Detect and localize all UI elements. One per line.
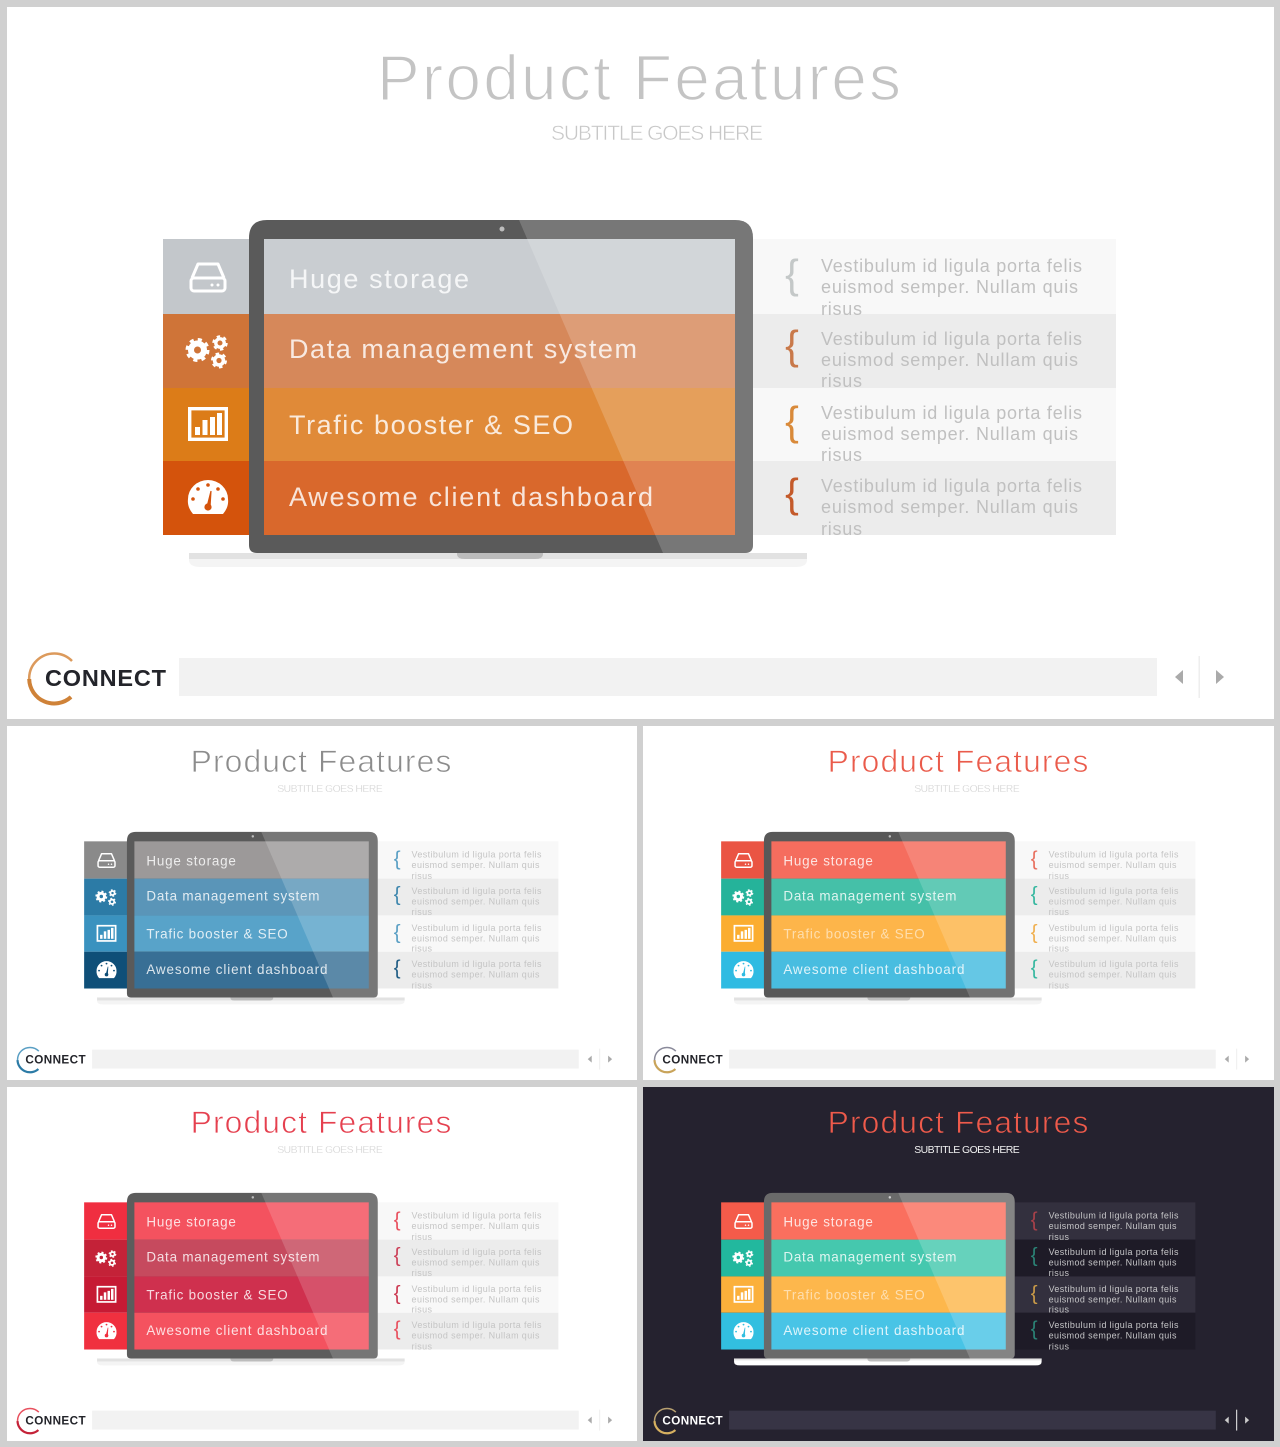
brace 1: { bbox=[785, 251, 799, 297]
description 2: risus bbox=[1049, 1268, 1070, 1278]
description 3: Vestibulum id ligula porta felis bbox=[821, 403, 1082, 423]
description 2: Vestibulum id ligula porta felis bbox=[1049, 886, 1179, 896]
description 4: Vestibulum id ligula porta felis bbox=[1049, 959, 1179, 969]
icon: gears bbox=[96, 1251, 116, 1266]
feature label 1: Huge storage bbox=[146, 1215, 236, 1230]
navigation arrows bbox=[1225, 1049, 1249, 1070]
icon: dashboard gauge bbox=[733, 961, 754, 978]
description 2: euismod semper. Nullam quis bbox=[1049, 1257, 1177, 1267]
panel: main slide, orange theme bbox=[7, 7, 1274, 719]
description 1: risus bbox=[412, 871, 433, 881]
brace 3: { bbox=[394, 1283, 401, 1305]
subtitle: SUBTITLE GOES HERE bbox=[277, 1145, 383, 1156]
description 4: risus bbox=[1049, 1342, 1070, 1352]
icon column bbox=[84, 841, 129, 989]
brace 3: { bbox=[394, 922, 401, 944]
description 1: Vestibulum id ligula porta felis bbox=[1049, 850, 1179, 860]
description 2: euismod semper. Nullam quis bbox=[412, 896, 540, 906]
icon: bar chart bbox=[97, 926, 116, 941]
description 3: risus bbox=[1049, 944, 1070, 954]
brace 1: { bbox=[394, 849, 401, 871]
title: Product Features bbox=[191, 1104, 451, 1140]
description 4: risus bbox=[1049, 981, 1070, 991]
footer bar bbox=[729, 1411, 1216, 1430]
brace 3: { bbox=[1031, 1283, 1038, 1305]
description rows bbox=[378, 1202, 558, 1352]
description 1: Vestibulum id ligula porta felis bbox=[1049, 1211, 1179, 1221]
icon: dashboard gauge bbox=[97, 961, 117, 978]
brace 2: { bbox=[1031, 1245, 1038, 1267]
description 3: euismod semper. Nullam quis bbox=[1049, 933, 1177, 943]
icon: storage drive bbox=[98, 854, 115, 867]
panel: small slide, red theme bbox=[7, 1087, 637, 1441]
description rows bbox=[378, 841, 558, 991]
description rows bbox=[1015, 841, 1195, 991]
footer bar bbox=[92, 1411, 579, 1430]
feature label 3: Trafic booster & SEO bbox=[289, 410, 573, 440]
icon: bar chart bbox=[734, 926, 753, 941]
icon column bbox=[163, 239, 253, 535]
feature label 2: Data management system bbox=[783, 1250, 957, 1265]
logo: CONNECT bbox=[25, 1054, 86, 1067]
laptop bbox=[97, 832, 405, 1004]
footer bar bbox=[729, 1050, 1216, 1069]
icon: bar chart bbox=[97, 1287, 116, 1302]
feature label 1: Huge storage bbox=[289, 264, 469, 294]
description 3: Vestibulum id ligula porta felis bbox=[1049, 923, 1179, 933]
feature label 3: Trafic booster & SEO bbox=[783, 926, 925, 941]
description 1: risus bbox=[412, 1232, 433, 1242]
title: Product Features bbox=[828, 1104, 1088, 1140]
subtitle: SUBTITLE GOES HERE bbox=[551, 122, 763, 145]
brace 2: { bbox=[1031, 884, 1038, 906]
description 2: Vestibulum id ligula porta felis bbox=[821, 329, 1082, 349]
footer bar bbox=[92, 1050, 579, 1069]
description 1: Vestibulum id ligula porta felis bbox=[412, 1211, 542, 1221]
description 4: risus bbox=[412, 981, 433, 991]
feature label 4: Awesome client dashboard bbox=[289, 482, 653, 512]
description 3: Vestibulum id ligula porta felis bbox=[1049, 1284, 1179, 1294]
icon: bar chart bbox=[190, 409, 226, 439]
brace 4: { bbox=[785, 470, 799, 516]
brace 4: { bbox=[1031, 1319, 1038, 1341]
subtitle: SUBTITLE GOES HERE bbox=[914, 784, 1020, 795]
brace 1: { bbox=[1031, 1210, 1038, 1232]
title: Product Features bbox=[828, 743, 1088, 779]
subtitle: SUBTITLE GOES HERE bbox=[914, 1145, 1020, 1156]
description 3: euismod semper. Nullam quis bbox=[412, 933, 540, 943]
description 3: risus bbox=[1049, 1305, 1070, 1315]
logo: CONNECT bbox=[45, 665, 167, 691]
description 1: risus bbox=[1049, 871, 1070, 881]
description 3: risus bbox=[821, 445, 862, 465]
icon: storage drive bbox=[735, 1215, 752, 1228]
logo bbox=[655, 1047, 723, 1072]
navigation arrows bbox=[588, 1410, 612, 1431]
icon column bbox=[721, 841, 766, 989]
brace 2: { bbox=[785, 322, 799, 368]
brace 1: { bbox=[394, 1210, 401, 1232]
description 1: risus bbox=[821, 299, 862, 319]
description 4: euismod semper. Nullam quis bbox=[412, 970, 540, 980]
brace 1: { bbox=[1031, 849, 1038, 871]
description 4: Vestibulum id ligula porta felis bbox=[1049, 1320, 1179, 1330]
brace 4: { bbox=[394, 958, 401, 980]
navigation arrows bbox=[588, 1049, 612, 1070]
description 3: risus bbox=[412, 944, 433, 954]
logo: CONNECT bbox=[662, 1415, 723, 1428]
laptop bbox=[97, 1193, 405, 1365]
laptop bbox=[189, 220, 807, 567]
description 3: euismod semper. Nullam quis bbox=[412, 1294, 540, 1304]
logo: CONNECT bbox=[662, 1054, 723, 1067]
logo: CONNECT bbox=[25, 1415, 86, 1428]
logo bbox=[18, 1047, 86, 1072]
laptop bbox=[734, 1193, 1042, 1365]
icon column bbox=[84, 1202, 129, 1350]
description 3: euismod semper. Nullam quis bbox=[1049, 1294, 1177, 1304]
icon: dashboard gauge bbox=[97, 1322, 117, 1339]
title: Product Features bbox=[377, 42, 901, 114]
laptop bbox=[734, 832, 1042, 1004]
description 3: euismod semper. Nullam quis bbox=[821, 424, 1078, 444]
brace 2: { bbox=[394, 1245, 401, 1267]
brace 4: { bbox=[1031, 958, 1038, 980]
feature label 3: Trafic booster & SEO bbox=[146, 926, 288, 941]
icon: gears bbox=[733, 890, 753, 905]
description 4: Vestibulum id ligula porta felis bbox=[412, 959, 542, 969]
feature label 1: Huge storage bbox=[783, 854, 873, 869]
description 3: Vestibulum id ligula porta felis bbox=[412, 1284, 542, 1294]
description 4: euismod semper. Nullam quis bbox=[821, 497, 1078, 517]
icon: storage drive bbox=[98, 1215, 115, 1228]
feature label 2: Data management system bbox=[146, 1250, 320, 1265]
description 4: euismod semper. Nullam quis bbox=[1049, 1331, 1177, 1341]
feature label 2: Data management system bbox=[289, 334, 637, 364]
feature label 1: Huge storage bbox=[783, 1215, 873, 1230]
icon: gears bbox=[187, 336, 227, 368]
description 1: Vestibulum id ligula porta felis bbox=[412, 850, 542, 860]
panel: small slide, dark theme bbox=[643, 1087, 1274, 1441]
logo bbox=[29, 654, 167, 704]
logo bbox=[18, 1408, 86, 1433]
description 1: euismod semper. Nullam quis bbox=[412, 860, 540, 870]
brace 3: { bbox=[1031, 922, 1038, 944]
description 4: risus bbox=[412, 1342, 433, 1352]
icon: storage drive bbox=[191, 264, 225, 291]
feature label 3: Trafic booster & SEO bbox=[146, 1287, 288, 1302]
feature label 4: Awesome client dashboard bbox=[783, 962, 964, 977]
feature label 3: Trafic booster & SEO bbox=[783, 1287, 925, 1302]
description 2: Vestibulum id ligula porta felis bbox=[412, 1247, 542, 1257]
description 1: euismod semper. Nullam quis bbox=[412, 1221, 540, 1231]
feature label 2: Data management system bbox=[783, 889, 957, 904]
description 3: risus bbox=[412, 1305, 433, 1315]
description 1: euismod semper. Nullam quis bbox=[821, 277, 1078, 297]
brace 4: { bbox=[394, 1319, 401, 1341]
feature label 2: Data management system bbox=[146, 889, 320, 904]
title: Product Features bbox=[191, 743, 451, 779]
icon: gears bbox=[733, 1251, 753, 1266]
description 4: euismod semper. Nullam quis bbox=[1049, 970, 1177, 980]
brace 3: { bbox=[785, 398, 799, 444]
description 1: euismod semper. Nullam quis bbox=[1049, 860, 1177, 870]
panel: small slide, blue theme bbox=[7, 726, 637, 1080]
subtitle: SUBTITLE GOES HERE bbox=[277, 784, 383, 795]
icon column bbox=[721, 1202, 766, 1350]
description 2: Vestibulum id ligula porta felis bbox=[1049, 1247, 1179, 1257]
description rows bbox=[753, 239, 1116, 539]
description 3: Vestibulum id ligula porta felis bbox=[412, 923, 542, 933]
icon: dashboard gauge bbox=[188, 480, 228, 514]
icon: dashboard gauge bbox=[733, 1322, 754, 1339]
icon: gears bbox=[96, 890, 116, 905]
footer bar bbox=[179, 658, 1157, 696]
description 1: euismod semper. Nullam quis bbox=[1049, 1221, 1177, 1231]
description 4: euismod semper. Nullam quis bbox=[412, 1331, 540, 1341]
icon: storage drive bbox=[735, 854, 752, 867]
feature label 4: Awesome client dashboard bbox=[146, 1323, 327, 1338]
description 4: risus bbox=[821, 519, 862, 539]
description 2: Vestibulum id ligula porta felis bbox=[412, 886, 542, 896]
description 2: risus bbox=[821, 371, 862, 391]
description 2: euismod semper. Nullam quis bbox=[821, 350, 1078, 370]
icon: bar chart bbox=[734, 1287, 753, 1302]
description 2: risus bbox=[412, 1268, 433, 1278]
brace 2: { bbox=[394, 884, 401, 906]
description 1: risus bbox=[1049, 1232, 1070, 1242]
description 4: Vestibulum id ligula porta felis bbox=[412, 1320, 542, 1330]
panel: small slide, multicolour theme bbox=[643, 726, 1274, 1080]
logo bbox=[655, 1408, 723, 1433]
feature label 4: Awesome client dashboard bbox=[146, 962, 327, 977]
feature label 1: Huge storage bbox=[146, 854, 236, 869]
navigation arrows bbox=[1175, 656, 1224, 698]
description 1: Vestibulum id ligula porta felis bbox=[821, 256, 1082, 276]
description 2: risus bbox=[1049, 907, 1070, 917]
description 2: euismod semper. Nullam quis bbox=[412, 1257, 540, 1267]
description 4: Vestibulum id ligula porta felis bbox=[821, 476, 1082, 496]
description rows bbox=[1015, 1202, 1195, 1352]
navigation arrows bbox=[1225, 1410, 1249, 1431]
description 2: euismod semper. Nullam quis bbox=[1049, 896, 1177, 906]
description 2: risus bbox=[412, 907, 433, 917]
feature label 4: Awesome client dashboard bbox=[783, 1323, 964, 1338]
